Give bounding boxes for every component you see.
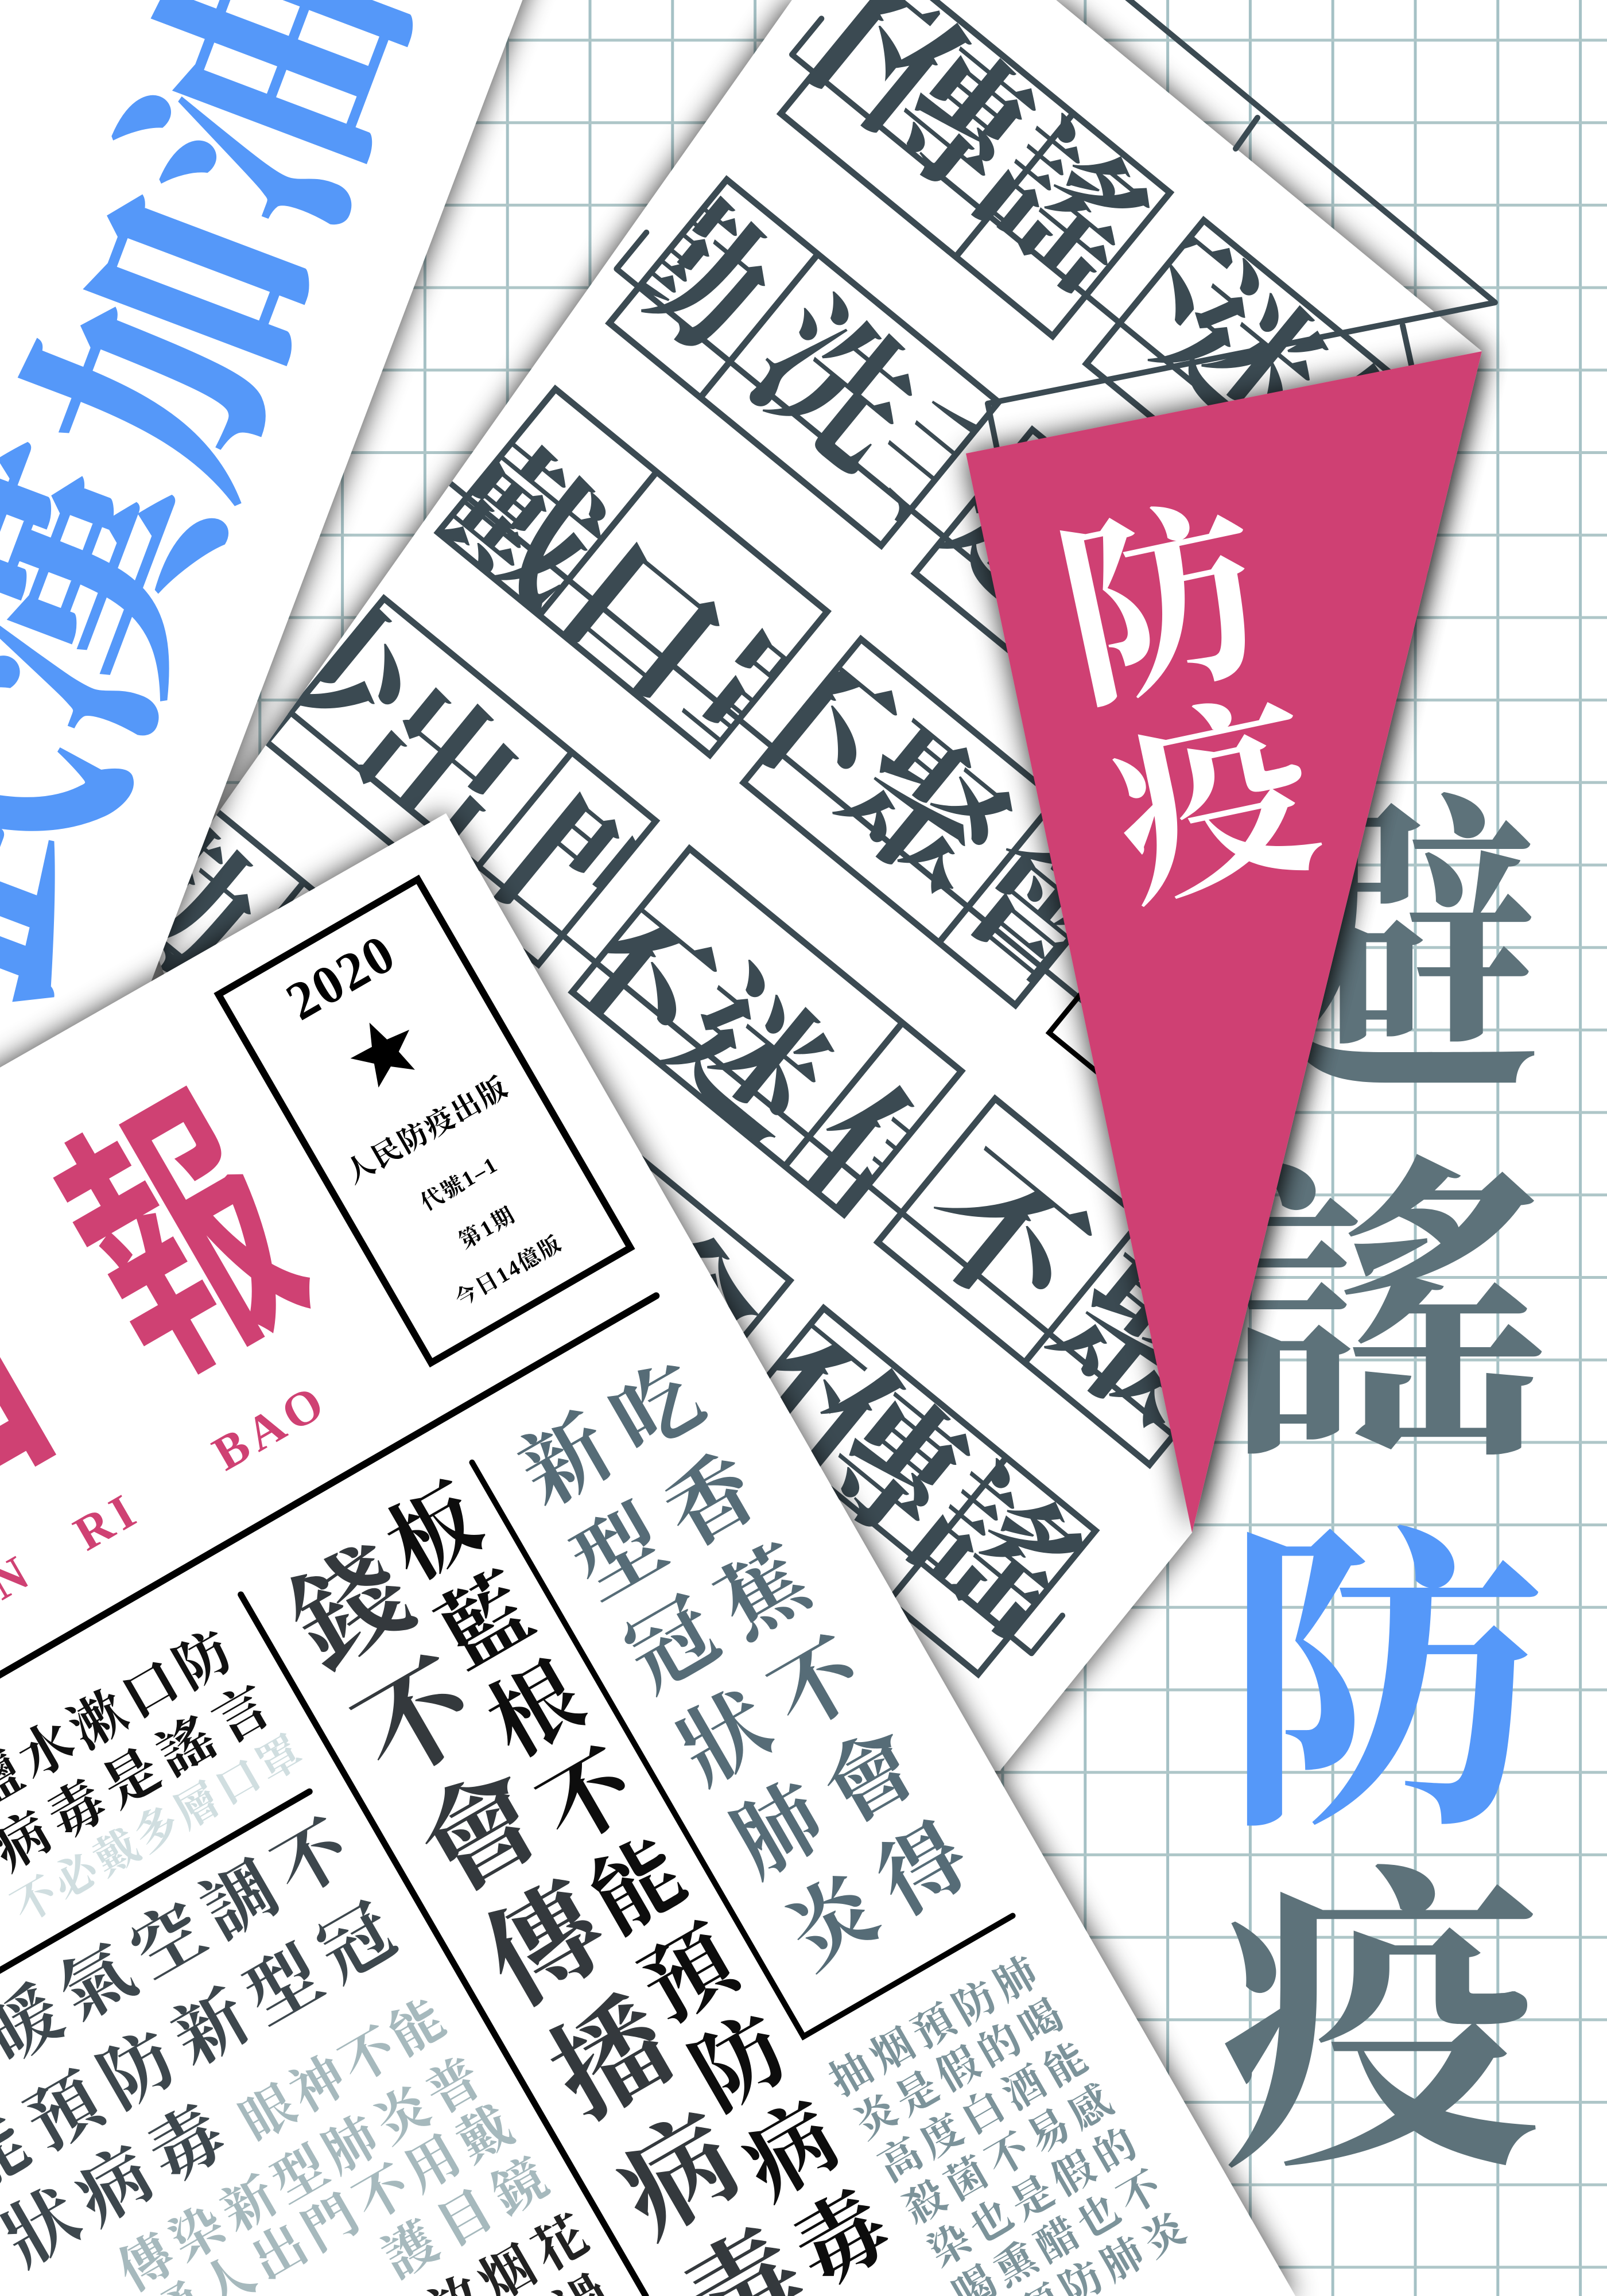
masthead pinyin [0, 1373, 337, 1610]
icon: star [340, 1007, 428, 1095]
row 1: 不傳謠 不迷信 [776, 0, 1463, 577]
panel: blue slogan sheet [0, 0, 535, 1119]
row 2: 勤洗手: 手 [837, 369, 1059, 593]
issue info box: 人民防疫出版 [340, 1070, 514, 1189]
issue info box: 代號1–1 [417, 1152, 503, 1216]
block: salt water rumour [0, 1615, 310, 1953]
row 1: 不傳謠 不迷信: 迷 [1131, 243, 1355, 469]
row 5: 勤洗手 不聚會 不傳謠: 謠 [884, 1440, 1106, 1665]
issue info box: 2020 [277, 923, 406, 1032]
block: eye contact rumour: 護目鏡 [373, 2148, 557, 2289]
right column heading: 避謠防疫 [1219, 777, 1547, 2208]
row 4: 少出門 不迷信 不聚會: 聚 [1024, 1235, 1247, 1461]
row 3: 戴口罩 不聚會: 罩 [649, 610, 871, 835]
issue info box: 第1期 [455, 1202, 521, 1254]
row 2: 勤洗手: 洗 [722, 274, 944, 498]
row 5: 勤洗手 不聚會 不傳謠: 不 [687, 1279, 912, 1506]
row 3: 戴口罩 不聚會 [434, 385, 1320, 1217]
issue info box: 今日14億版 [451, 1231, 566, 1312]
row 5: 勤洗手 不聚會 不傳謠: 聚 [433, 1087, 657, 1313]
right column heading: 避謠防疫: 疫 [1219, 1852, 1540, 2208]
row 3: 戴口罩 不聚會: 不 [694, 605, 920, 832]
block: eye contact rumour: 眼神不能 [231, 1989, 455, 2152]
row 2: 勤洗手: 風 [1027, 525, 1249, 748]
row 3: 戴口罩 不聚會: 戴 [409, 414, 631, 638]
row 4: 少出門 不迷信 不聚會: 少 [222, 557, 451, 787]
row 1: 不傳謠 不迷信: 不 [1032, 162, 1257, 390]
block: smoking rumour: 高度白酒能 [871, 2035, 1095, 2190]
row 5: 勤洗手 不聚會 不傳謠: 傳 [767, 1344, 988, 1568]
block: eye contact rumour [75, 1984, 557, 2296]
block: smoking rumour [822, 1948, 1196, 2296]
row 1: 不傳謠 不迷信: 傳 [832, 0, 1054, 223]
pink heading: 防疫 [1043, 479, 1335, 933]
row 2: 勤洗手: 通 [912, 430, 1134, 654]
row 3: 戴口罩 不聚會: 會 [934, 801, 1156, 1025]
block: salt water rumour: 不必戴多層口罩 [4, 1727, 310, 1932]
masthead pinyin: RI [65, 1481, 149, 1561]
row 1: 不傳謠 不迷信: 信 [1247, 338, 1469, 562]
block: air conditioner rumour [0, 1806, 457, 2285]
block: smoking rumour: 殺菌不易感 [896, 2077, 1120, 2233]
row 2: 勤洗手: 勤 [577, 156, 799, 380]
block: smoking rumour: 抽烟預防肺 [822, 1949, 1046, 2105]
panel: outlined slogan sheet [152, 0, 1500, 1785]
pink heading: 防疫: 疫 [1096, 677, 1335, 933]
masthead pinyin: BAO [204, 1373, 337, 1481]
row 5: 勤洗手 不聚會 不傳謠: 勤 [63, 784, 285, 1009]
row 4: 少出門 不迷信 不聚會: 迷 [637, 945, 861, 1171]
issue info box [219, 879, 630, 1363]
row 4: 少出門 不迷信 不聚會: 信 [773, 1060, 995, 1284]
row 3: 戴口罩 不聚會: 口 [529, 512, 751, 736]
panel: newspaper sheet [0, 813, 1295, 2296]
row 3: 戴口罩 不聚會: 聚 [812, 701, 1035, 926]
column: banana rumour: 吃香蕉不會得 [597, 1346, 987, 1933]
row 5: 勤洗手 不聚會 不傳謠: 洗 [208, 903, 429, 1127]
block: eye contact rumour: 傳染新型肺炎普 [109, 2047, 491, 2296]
row 5: 勤洗手 不聚會 不傳謠: 手 [323, 997, 545, 1221]
row 4: 少出門 不迷信 不聚會: 出 [326, 657, 548, 881]
pink heading: 防疫: 防 [1043, 479, 1282, 735]
slogan rows [41, 0, 1607, 1692]
fold outline [988, 0, 1495, 471]
row 4: 少出門 不迷信 不聚會 [266, 594, 1249, 1469]
row 5: 勤洗手 不聚會 不傳謠 [161, 810, 1100, 1678]
row 1: 不傳謠 不迷信: 謠 [950, 95, 1172, 319]
block: smoking rumour: 炎是假的喝 [847, 1992, 1070, 2147]
right column heading: 避謠防疫: 謠 [1226, 1142, 1547, 1498]
column: banana rumour: 新型冠狀肺炎 [505, 1395, 899, 1986]
row 4: 少出門 不迷信 不聚會: 門 [471, 775, 693, 999]
right column heading: 避謠防疫: 避 [1220, 777, 1541, 1133]
panel: pink triangle [966, 351, 1482, 1533]
rules [0, 1296, 1086, 2296]
row 4: 少出門 不迷信 不聚會: 不 [890, 1125, 1115, 1352]
right column heading: 避謠防疫: 防 [1224, 1511, 1545, 1867]
column: banlangen rumour: 板藍根不能預防病毒 [371, 1467, 907, 2296]
row 5: 勤洗手 不聚會 不傳謠: 會 [562, 1193, 784, 1417]
row 4: 少出門 不迷信 不聚會: 不 [514, 861, 740, 1088]
block: smoking rumour: 染也是假的 [921, 2120, 1144, 2276]
row 2: 勤洗手 [605, 175, 1047, 653]
